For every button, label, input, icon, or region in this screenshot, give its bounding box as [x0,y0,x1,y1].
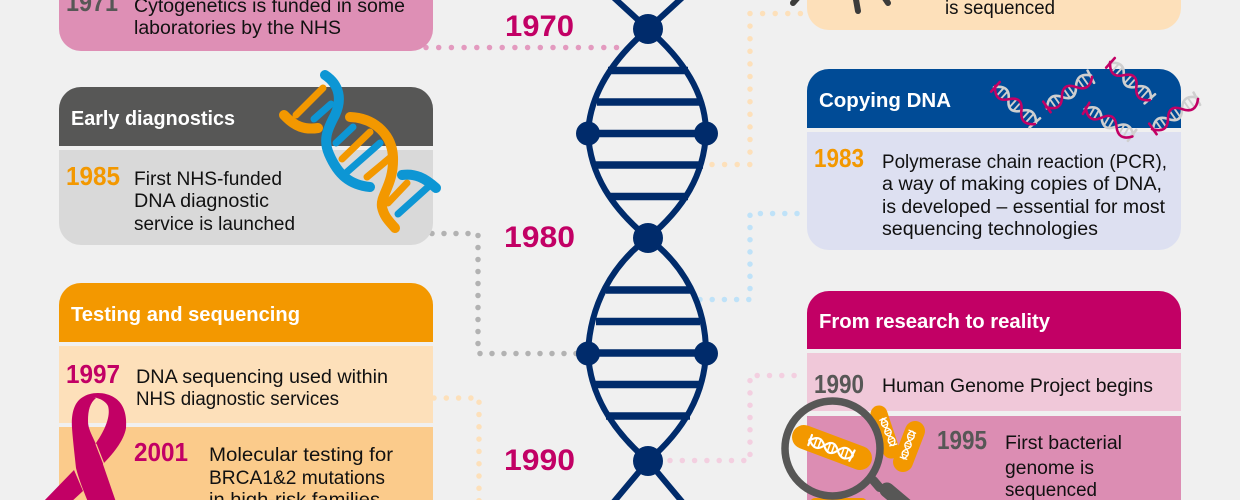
row 1990 [807,353,1181,411]
lens ring [785,401,880,496]
decade label 1980: 1980 [504,221,575,254]
row 1997 [59,346,433,423]
text: 1995: First bacterial [1005,433,1122,454]
helix nodes [576,14,718,476]
heading text: Early diagnostics [71,107,235,130]
text: 1985: service is launched [134,214,295,235]
year 1997: 1997 [66,359,120,389]
icon: magnifying glass over bacteria [785,401,925,500]
text: 1983: Polymerase chain reaction (PCR), [882,152,1167,173]
year 1983: 1983 [814,143,864,173]
year 1990: 1990 [814,369,864,399]
text: 1990: Human Genome Project begins [882,376,1153,397]
year 1985: 1985 [66,161,120,191]
panel: cytogenetics [59,0,433,51]
connector: 1983 [700,214,804,300]
text: 1983: a way of making copies of DNA, [882,174,1162,195]
heading text: Copying DNA [819,89,951,112]
heading text: Testing and sequencing [71,303,300,326]
decade label 1990: 1990 [504,444,575,477]
heading bar [807,69,1181,128]
heading bar [59,87,433,146]
heading text: From research to reality [819,310,1051,333]
body [59,150,433,245]
panel: testing and sequencing [59,283,433,500]
text: 1997: DNA sequencing used within [136,367,388,388]
text: 2001 [209,445,394,500]
text: cytogenetics: laboratories by the NHS [134,18,341,39]
helix strands [588,0,706,500]
row 1995 [807,416,1181,500]
heading bar [807,291,1181,349]
row 2001 [59,427,433,500]
connector: 1997 to 1990s [434,398,479,500]
text: 1983 [882,152,1167,240]
text: 1985 [134,169,295,235]
year 2001: 2001 [134,437,188,467]
text: 1997 [136,367,388,410]
text: 2001: Molecular testing for [209,445,394,466]
text: 1983: sequencing technologies [882,219,1098,240]
icon: chromosome fragments [793,0,888,11]
central DNA helix [576,0,718,500]
text: 1983: is developed – essential for most [882,197,1166,218]
connector: 1971 to 1970 [426,45,618,50]
handle [874,480,880,488]
heading bar [59,283,433,342]
icon: awareness ribbon [42,393,126,500]
panel: copying DNA [807,57,1201,250]
text: cytogenetics [134,0,405,39]
connector: top right panel [712,14,806,164]
decade label 1970: 1970 [505,10,574,43]
icon: copied DNA strands [990,57,1201,142]
helix rungs [590,70,704,416]
icon: orange and blue DNA [284,75,436,228]
panel: early diagnostics [59,87,433,245]
bacterial DNA [807,417,916,461]
bacteria capsules [804,414,915,500]
panel: from research to reality [807,291,1181,500]
text: 2001: BRCA1&2 mutations [209,468,385,489]
text: 1995: genome is [1005,458,1094,479]
text: 1985: DNA diagnostic [134,191,269,212]
panel: top right [793,0,1181,30]
text: 1995 [1005,433,1122,500]
body [807,132,1181,250]
text: 1985: First NHS-funded [134,169,282,190]
year 1995: 1995 [937,425,987,455]
text: 1997: NHS diagnostic services [136,389,339,410]
connector: 1985 to 1980s [432,234,580,354]
connector: 1990 right [670,376,806,460]
